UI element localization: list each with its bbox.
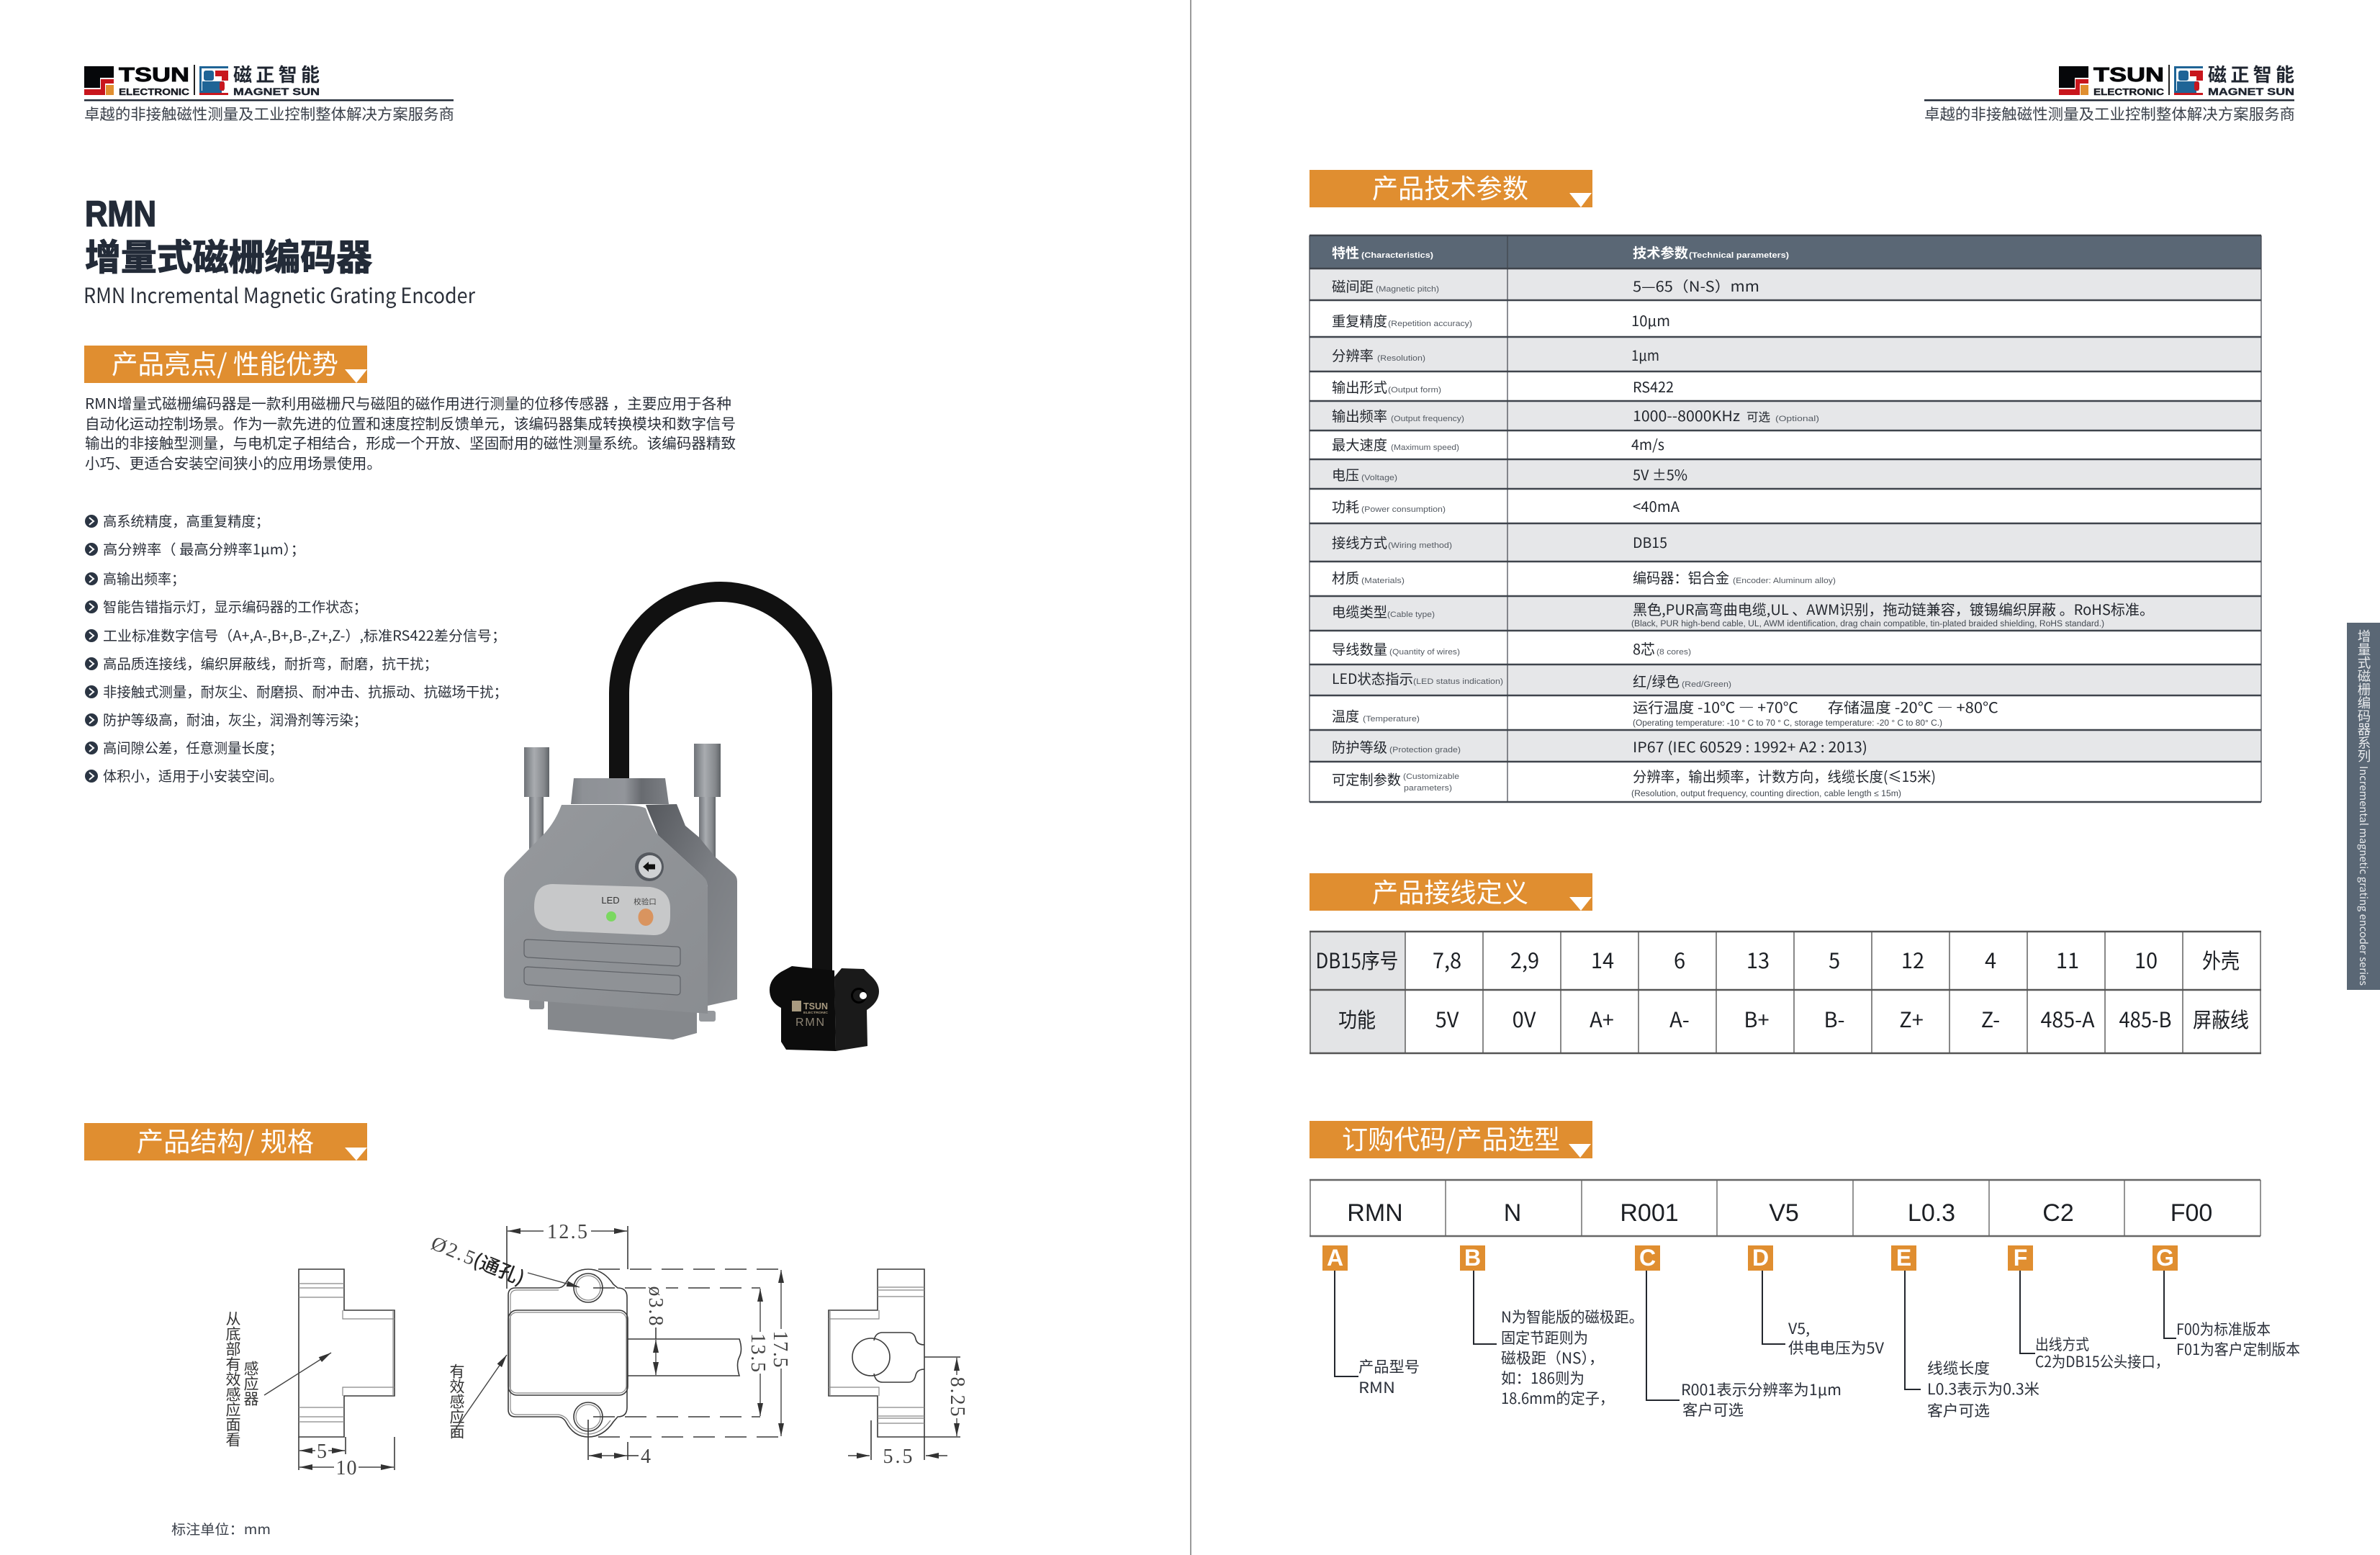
code key: D — [1748, 1245, 1885, 1358]
table: technical parameters — [1310, 235, 2261, 802]
tagline: left: 卓越的非接触磁性测量及工业控制整体解决方案服务商 — [84, 102, 454, 125]
wiring row: function: A+ — [1590, 1004, 1614, 1034]
table: ordering code: F00 — [2171, 1199, 2212, 1227]
row: maximum speed: 最大速度 — [1332, 433, 1387, 454]
logo text: ELECTRONIC: ELECTRONIC — [2093, 86, 2165, 97]
logo divider — [2168, 65, 2170, 95]
dim: 17.5: 17.5 — [769, 1330, 791, 1368]
text block: product description: RMN增量式磁栅编码器是一款利用磁栅尺与磁阻的磁作用进行测量的位移传感器 ，主要应用于各种 — [85, 392, 731, 413]
section header: technical parameters: 产品技术参数 — [1372, 167, 1528, 206]
feature 2: 高分辨率（ 最高分辨率1μm）； — [103, 538, 305, 559]
row: LED status: 红/绿色 — [1633, 670, 1680, 691]
code key: F: F — [2014, 1245, 2027, 1271]
code key: C: R001表示分辨率为1μm — [1681, 1379, 1842, 1400]
row: output form: (Output form) — [1388, 386, 1441, 395]
feature 5: 工业标准数字信号（A+,A-,B+,B-,Z+,Z-）,标准RS422差分信号； — [103, 624, 506, 645]
row: repetition accuracy: (Repetition accuracy) — [1388, 320, 1472, 328]
row: output frequency: 可选 — [1746, 407, 1770, 425]
wiring row: DB15 pin number: 7,8 — [1433, 945, 1461, 975]
row: output form — [1332, 376, 1674, 397]
row: output frequency: (Optional) — [1775, 415, 1819, 423]
code key: D: 供电电压为5V — [1788, 1337, 1885, 1358]
dim: 5.5 — [848, 1420, 947, 1468]
feature 8: 防护等级高，耐油，灰尘，润滑剂等污染； — [103, 708, 367, 729]
logo text: TSUN: TSUN — [119, 63, 189, 86]
code key: D: D — [1752, 1245, 1769, 1271]
section header: structure: 产品结构/ 规格 — [137, 1120, 314, 1159]
feature 10: 体积小，适用于小安装空间。 — [103, 765, 283, 785]
wiring row: DB15 pin number: 5 — [1829, 945, 1840, 975]
dim: 12.5: 12.5 — [547, 1221, 587, 1243]
wiring row: DB15 pin number: 13 — [1746, 945, 1770, 975]
view: right side — [829, 1269, 968, 1468]
table: ordering code: C2 — [2042, 1199, 2074, 1227]
dim: 3.8 — [644, 1284, 667, 1375]
row: quantity of wires — [1332, 638, 1691, 659]
row: temperature: 存储温度 -20℃ — +80℃ — [1828, 696, 1998, 717]
note: unit: 标注单位：mm — [171, 1519, 271, 1538]
wiring row: function: 5V — [1435, 1004, 1459, 1034]
LED indicator — [606, 911, 616, 921]
code key: E — [1891, 1245, 2039, 1421]
code key: A: RMN — [1358, 1376, 1395, 1398]
row: materials — [1332, 567, 1836, 587]
code key: G: G — [2156, 1245, 2174, 1271]
connector screws — [524, 744, 721, 1022]
row: temperature: 运行温度 -10℃ — +70℃ — [1633, 696, 1798, 717]
table header row: 技术参数 — [1633, 243, 1688, 262]
code key: B — [1460, 1245, 1644, 1409]
row: magnetic pitch: 5—65（N-S）mm — [1633, 275, 1759, 296]
section header: structure — [84, 1120, 367, 1160]
text block: product description: 自动化运动控制场景。作为一款先进的位置和速度控制反馈单元，该编码器集成转换模块和数字信号 — [85, 412, 736, 433]
table: ordering code: L0.3 — [1908, 1199, 1955, 1227]
row: wiring method — [1332, 531, 1667, 552]
code key: E: 线缆长度 — [1927, 1357, 1990, 1379]
row: customizable parameters: (Resolution, output frequency, counting direction, cable length ≤ 15m) — [1631, 790, 1901, 798]
view: middle front — [428, 1221, 793, 1468]
table: ordering code: RMN — [1347, 1199, 1403, 1227]
section header: wiring definition — [1310, 871, 1592, 911]
code key: E: E — [1896, 1245, 1911, 1271]
row: repetition accuracy: 10μm — [1631, 310, 1670, 330]
row: power consumption — [1332, 495, 1680, 516]
section header: highlights: 产品亮点/ 性能优势 — [112, 343, 338, 382]
row: power consumption: (Power consumption) — [1361, 505, 1446, 514]
header rule: right — [1924, 99, 2294, 101]
row: quantity of wires: (Quantity of wires) — [1389, 648, 1460, 657]
row: customizable parameters: parameters) — [1404, 784, 1452, 793]
code key: A: A — [1327, 1245, 1343, 1271]
text block: product description — [85, 392, 736, 473]
connector plug — [548, 997, 697, 1040]
wiring row: function: 功能 — [1338, 1004, 1376, 1034]
calibration port label: 校验口 — [634, 896, 657, 907]
row: output frequency: 输出频率 — [1332, 405, 1387, 425]
side tab: series name — [2347, 623, 2380, 990]
row: materials: 材质 — [1332, 567, 1359, 587]
wiring row: function: 485-A — [2040, 1004, 2095, 1034]
row: power consumption: 功耗 — [1332, 495, 1359, 516]
row: temperature: (Operating temperature: -10 ° C to 70 ° C, storage temperature: -20 ° C to 80° C.) — [1633, 719, 1942, 728]
code key: A — [1322, 1245, 1420, 1398]
row: voltage: 电压 — [1332, 464, 1359, 484]
table backgrounds — [1310, 269, 2261, 762]
row: LED status: (LED status indication) — [1413, 677, 1503, 686]
row: voltage — [1332, 464, 1687, 484]
section header: technical parameters — [1310, 167, 1592, 207]
note: sensor: 感应器 — [240, 1361, 262, 1406]
icon: Magnet Sun mark — [2174, 66, 2203, 95]
row: resolution — [1332, 344, 1659, 365]
row: customizable parameters: 可定制参数 — [1332, 768, 1401, 789]
icon: TSUN mark — [84, 66, 114, 95]
row: wiring method: 接线方式 — [1332, 531, 1387, 552]
row: customizable parameters: (Customizable — [1403, 772, 1459, 781]
dim: 8.25: 8.25 — [946, 1376, 968, 1417]
connector grooves — [524, 939, 680, 995]
text block: product description: 小巧、更适合安装空间狭小的应用场景使用。 — [85, 451, 382, 473]
title: Chinese product name: 增量式磁栅编码器 — [85, 229, 372, 281]
row: resolution: 分辨率 — [1332, 344, 1374, 365]
row: wiring method: (Wiring method) — [1388, 541, 1452, 550]
row: temperature: 温度 — [1332, 705, 1359, 726]
row: quantity of wires: (8 cores) — [1656, 648, 1691, 657]
logo text: 磁正智能: 磁正智能 — [233, 60, 320, 87]
row: wiring method: DB15 — [1633, 531, 1667, 552]
feature 3: 高输出频率； — [103, 567, 185, 588]
row: quantity of wires: 8芯 — [1633, 638, 1655, 659]
wiring row: function — [1338, 1004, 2249, 1034]
dim: 12.5 — [507, 1221, 628, 1289]
row: power consumption: <40mA — [1633, 495, 1680, 516]
row: protection grade: (Protection grade) — [1389, 746, 1461, 754]
row: LED status: LED状态指示 — [1332, 667, 1413, 688]
feature 6: 高品质连接线，编织屏蔽线，耐折弯，耐磨，抗干扰； — [103, 652, 438, 673]
feature 1: 高系统精度，高重复精度； — [103, 510, 269, 531]
sensor head: ELECTRONIC — [803, 1011, 829, 1014]
tagline: right: 卓越的非接触磁性测量及工业控制整体解决方案服务商 — [1924, 102, 2295, 125]
wiring row: DB15 pin number: 2,9 — [1510, 945, 1539, 975]
row: cable type: 黑色,PUR高弯曲电缆,UL 、AWM识别，拖动链兼容，镀锡编织屏蔽 。RoHS标准。 — [1633, 598, 2154, 619]
row: LED status — [1332, 667, 1731, 691]
row: quantity of wires: 导线数量 — [1332, 638, 1387, 659]
logo divider — [194, 65, 195, 95]
code key: F: 出线方式 — [2035, 1333, 2089, 1355]
code key: C: C — [1639, 1245, 1656, 1271]
feature 7: 非接触式测量，耐灰尘、耐磨损、耐冲击、抗振动、抗磁场干扰； — [103, 680, 508, 701]
row: LED status: (Red/Green) — [1682, 680, 1731, 689]
wiring row: DB15 pin number — [1316, 945, 2240, 975]
LED label: LED — [601, 895, 620, 906]
wiring row: function: B+ — [1744, 1004, 1770, 1034]
code key: B: 18.6mm的定子， — [1501, 1387, 1614, 1409]
page divider — [1190, 0, 1191, 1555]
icon: TSUN mark — [2059, 66, 2088, 95]
logo: right page — [2059, 60, 2294, 97]
code key: G: F00为标准版本 — [2176, 1318, 2271, 1340]
code key: B: N为智能版的磁极距。 — [1501, 1306, 1644, 1328]
dim: 3.8: ø3.8 — [644, 1286, 667, 1326]
dim: 5: 5 — [317, 1441, 327, 1463]
wiring row: DB15 pin number: 4 — [1985, 945, 1996, 975]
row: protection grade: IP67 (IEC 60529 : 1992+ A2 : 2013) — [1633, 736, 1867, 757]
logo text: TSUN: TSUN — [2093, 63, 2164, 86]
wiring row: function: 屏蔽线 — [2193, 1004, 2249, 1034]
logo text: ELECTRONIC: ELECTRONIC — [119, 86, 190, 97]
cable — [619, 592, 822, 973]
wiring row: function: 485-B — [2119, 1004, 2171, 1034]
dim: bore 2.5 — [428, 1229, 580, 1291]
connector front face — [504, 805, 708, 1014]
dim: 5 — [299, 1437, 346, 1470]
side tab: series name: Incremental magnetic grating encoder series — [2356, 766, 2371, 986]
wiring row: function: 0V — [1513, 1004, 1536, 1034]
table rules — [1310, 235, 2261, 802]
row: magnetic pitch — [1332, 275, 1759, 296]
connector screw badge — [635, 852, 664, 881]
subtitle: English product name: RMN Incremental Magnetic Grating Encoder — [84, 279, 476, 310]
header rule: left — [84, 99, 454, 101]
code key: F — [2008, 1245, 2169, 1372]
dim: bore 2.5: (通孔) — [469, 1246, 529, 1291]
row: materials: (Materials) — [1361, 577, 1405, 585]
cable stub — [628, 1339, 742, 1376]
row: cable type: 电缆类型 — [1332, 600, 1387, 621]
calibration port — [638, 909, 654, 926]
side tab: series name: 增量式磁栅编码器系列 — [2355, 629, 2374, 762]
table header row: (Characteristics) — [1361, 251, 1433, 260]
row: maximum speed: (Maximum speed) — [1391, 443, 1459, 452]
dim: 13.5 — [747, 1289, 772, 1416]
code key: E: L0.3表示为0.3米 — [1927, 1378, 2039, 1400]
wiring row: function: Z+ — [1899, 1004, 1924, 1034]
code key: A: 产品型号 — [1358, 1356, 1420, 1377]
code key: C — [1635, 1245, 1842, 1420]
note: effective sensing face: 有效感应面 — [446, 1364, 468, 1439]
wiring row: DB15 pin number: 11 — [2056, 945, 2079, 975]
row: maximum speed: 4m/s — [1631, 433, 1664, 454]
table: ordering code: R001 — [1620, 1199, 1679, 1227]
row: output frequency — [1332, 405, 1819, 425]
row: cable type: (Black, PUR high-bend cable, UL, AWM identification, drag chain compatible, tin-plated braided shielding, RoHS standard.) — [1631, 620, 2104, 628]
wiring row: function: B- — [1824, 1004, 1845, 1034]
logo text: MAGNET SUN: MAGNET SUN — [2208, 86, 2294, 97]
row: temperature — [1332, 696, 1998, 728]
table: wiring definition — [1310, 932, 2261, 1053]
code key: F: C2为DB15公头接口， — [2035, 1351, 2169, 1372]
code key: G — [2153, 1245, 2300, 1360]
wiring row: DB15 pin number: 外壳 — [2202, 945, 2240, 975]
row: magnetic pitch: (Magnetic pitch) — [1376, 285, 1439, 294]
connector neck — [571, 778, 669, 804]
note: view from bottom: 从底部有效感应面看 — [222, 1311, 244, 1447]
dim: bore 2.5: Ø2.5 — [428, 1232, 478, 1270]
dim: 17.5 — [769, 1270, 793, 1436]
wiring row: function: Z- — [1981, 1004, 2000, 1034]
section header: ordering code: 订购代码/产品选型 — [1342, 1118, 1560, 1157]
row: output form: 输出形式 — [1332, 376, 1387, 397]
dim: 5.5: 5.5 — [883, 1446, 913, 1468]
sensor head: RMN — [795, 1017, 824, 1029]
code key: B: 固定节距则为 — [1501, 1327, 1588, 1348]
code key: D: V5, — [1788, 1317, 1810, 1339]
row: output frequency: (Output frequency) — [1391, 415, 1464, 423]
row: repetition accuracy: 重复精度 — [1332, 310, 1387, 330]
dim: 4: 4 — [641, 1446, 651, 1468]
code key: G: F01为客户定制版本 — [2176, 1338, 2300, 1360]
table header row — [1310, 235, 2261, 269]
row: output form: RS422 — [1633, 376, 1674, 397]
table: ordering code: N — [1504, 1199, 1521, 1227]
row: repetition accuracy — [1332, 310, 1670, 330]
dim: 10: 10 — [335, 1457, 357, 1479]
row: resolution: (Resolution) — [1377, 354, 1425, 363]
icon: Magnet Sun mark — [199, 66, 228, 95]
dim: 4 — [588, 1420, 651, 1468]
dimension drawing — [171, 1221, 968, 1538]
sensor head: TSUN — [803, 1001, 828, 1011]
feature 4: 智能告错指示灯，显示编码器的工作状态； — [103, 595, 367, 616]
row: maximum speed — [1332, 433, 1664, 454]
row: customizable parameters — [1332, 765, 1936, 798]
dim: 13.5: 13.5 — [747, 1333, 769, 1372]
row: customizable parameters: 分辨率，输出频率，计数方向，线缆长度(≤15米) — [1633, 765, 1936, 786]
row: magnetic pitch: 磁间距 — [1332, 275, 1374, 296]
row: cable type — [1332, 598, 2154, 628]
feature list — [85, 510, 508, 785]
logo: left page — [84, 60, 320, 97]
connector side face — [646, 804, 737, 1006]
row: protection grade: 防护等级 — [1332, 736, 1387, 757]
logo text: 磁正智能: 磁正智能 — [2208, 60, 2294, 87]
dim: 10 — [299, 1437, 395, 1479]
code key: B: B — [1464, 1245, 1481, 1271]
connector label plate — [534, 884, 670, 935]
code key: C: 客户可选 — [1682, 1399, 1744, 1420]
logo text: MAGNET SUN: MAGNET SUN — [233, 86, 320, 97]
table header row: 特性 — [1332, 243, 1359, 262]
product image: encoder with cable — [504, 592, 879, 1051]
wiring row: DB15 pin number: DB15序号 — [1316, 945, 1398, 975]
row: voltage: (Voltage) — [1361, 474, 1397, 482]
wiring row: DB15 pin number: 6 — [1674, 945, 1685, 975]
wiring row: DB15 pin number: 10 — [2135, 945, 2158, 975]
wiring row: DB15 pin number: 12 — [1901, 945, 1924, 975]
dim: 8.25 — [924, 1357, 968, 1437]
row: materials: 编码器：铝合金 — [1633, 567, 1729, 587]
code key: B: 如：186则为 — [1501, 1367, 1585, 1389]
code key: B: 磁极距（NS）， — [1501, 1347, 1604, 1369]
view: left side — [222, 1269, 395, 1479]
section header: wiring definition: 产品接线定义 — [1372, 871, 1528, 910]
table header row: (Technical parameters) — [1689, 251, 1789, 260]
row: voltage: 5V ±5% — [1633, 464, 1687, 484]
row: cable type: (Cable type) — [1387, 610, 1435, 619]
feature 9: 高间隙公差，任意测量长度； — [103, 736, 283, 757]
row: protection grade — [1332, 736, 1867, 757]
row: temperature: (Temperature) — [1363, 715, 1420, 724]
wiring row: DB15 pin number: 14 — [1591, 945, 1614, 975]
table: ordering code — [1310, 1180, 2260, 1236]
row: output frequency: 1000--8000KHz — [1633, 405, 1740, 425]
sensor head — [770, 966, 879, 1051]
title: RMN: RMN — [85, 194, 156, 234]
row: resolution: 1μm — [1631, 344, 1659, 365]
wiring row: function: A- — [1669, 1004, 1690, 1034]
code key: E: 客户可选 — [1927, 1400, 1990, 1421]
text block: product description: 输出的非接触型测量，与电机定子相结合，形成一个开放、坚固耐用的磁性测量系统。该编码器精致 — [85, 431, 736, 453]
table: ordering code: V5 — [1769, 1199, 1799, 1227]
row: materials: (Encoder: Aluminum alloy) — [1733, 577, 1836, 585]
